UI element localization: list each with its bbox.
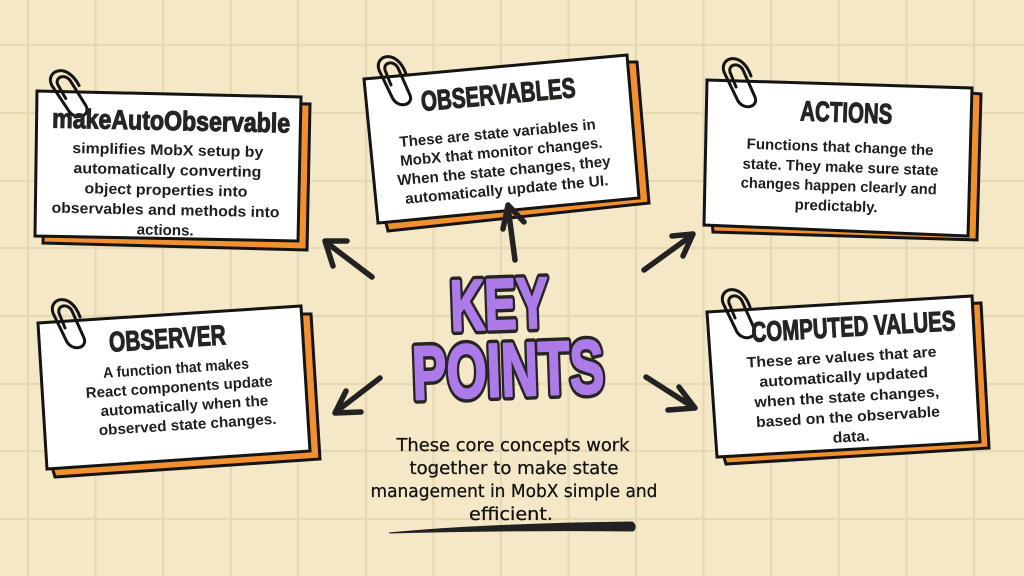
body text: computed values: based on the observable [756, 404, 940, 431]
summary text: together to make state [410, 459, 618, 479]
body text: observables: When the state changes, they [397, 153, 612, 189]
body text: observables [393, 115, 614, 208]
body text: actions: Functions that change the [746, 136, 934, 159]
panel: observer [38, 300, 320, 477]
body text: makeAutoObservable: object properties into [84, 180, 248, 201]
icon: paperclip [378, 57, 411, 105]
body text: computed values [746, 344, 942, 451]
body text: observer: automatically when the [100, 392, 269, 420]
heading: computed values: COMPUTED VALUES [751, 305, 956, 348]
body text: makeAutoObservable: observables and methods into [51, 200, 280, 221]
body text: observer [84, 354, 277, 440]
brush underline [389, 522, 635, 533]
heading: observer: OBSERVER [108, 319, 227, 358]
body text: makeAutoObservable: simplifies MobX setup by [72, 140, 264, 161]
icon: paperclip [723, 59, 756, 107]
body text: actions: predictably. [794, 196, 878, 216]
summary text [370, 436, 658, 525]
heading: actions: ACTIONS [800, 95, 893, 130]
title: key points: POINTS [411, 325, 606, 416]
body text: observables: automatically update the UI. [404, 172, 609, 208]
body text: observer: A function that makes [103, 356, 249, 382]
title: key points [411, 263, 606, 416]
body text: computed values: automatically updated [759, 364, 929, 391]
summary text: efficient. [469, 505, 553, 525]
body text: observer: observed state changes. [98, 411, 277, 439]
summary text: management in MobX simple and [370, 482, 658, 502]
body text: makeAutoObservable: actions. [136, 221, 194, 240]
body text: actions: state. They make sure state [742, 156, 939, 179]
summary text: These core concepts work [395, 436, 630, 456]
arrow: to computed values [646, 377, 695, 410]
heading: makeAutoObservable: makeAutoObservable [52, 104, 290, 138]
body text: computed values: data. [832, 428, 870, 447]
panel: observables [364, 55, 649, 231]
arrow: to actions [644, 234, 693, 270]
body text: observables: These are state variables in [399, 116, 596, 151]
arrow: to makeAutoObservable [325, 241, 372, 277]
icon: paperclip [722, 290, 755, 338]
body text: makeAutoObservable [51, 140, 281, 241]
body text: computed values: when the state changes, [753, 384, 940, 411]
heading: observables: OBSERVABLES [420, 72, 577, 117]
panel: makeAutoObservable [35, 68, 310, 250]
body text: computed values: These are values that are [746, 344, 937, 372]
body text: observer: React components update [85, 373, 273, 402]
panel: computed values [707, 290, 989, 464]
icon: paperclip [49, 68, 88, 120]
body text: actions [740, 136, 939, 218]
arrow: to observables [503, 205, 524, 260]
panel: actions [704, 59, 981, 240]
title: key points: POINTS [411, 325, 606, 416]
body text: makeAutoObservable: automatically converting [73, 160, 262, 181]
body text: actions: changes happen clearly and [741, 175, 937, 198]
body text: observables: MobX that monitor changes. [399, 135, 603, 170]
title: key points: KEY [449, 263, 550, 347]
arrow: to observer [335, 378, 380, 413]
icon: paperclip [52, 300, 85, 348]
title: key points: KEY [449, 263, 550, 347]
